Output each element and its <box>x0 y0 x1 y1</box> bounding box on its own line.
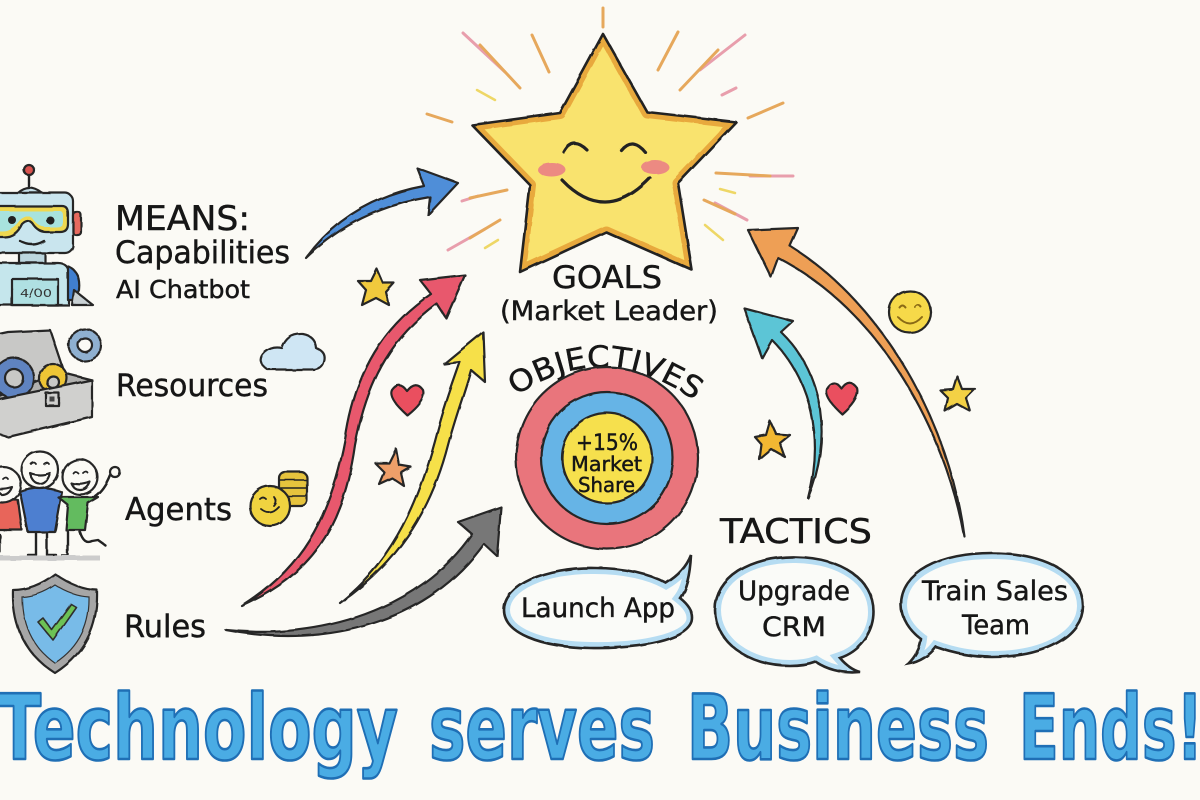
icon: agents group <box>0 452 120 558</box>
heading: goals <box>500 260 718 327</box>
icon: toolbox with gears <box>0 329 101 437</box>
text: market share objective: Market <box>571 452 642 476</box>
arrow: grey, rules to objectives <box>226 507 501 636</box>
title: technology serves business ends: Business <box>687 676 989 781</box>
icon: yellow star right <box>940 376 975 411</box>
text: resources: Resources <box>116 368 268 404</box>
icon: coins <box>250 472 307 526</box>
icon: sun rays <box>427 8 793 250</box>
text: market share objective: +15% <box>576 431 638 456</box>
icon: orange star <box>375 449 411 486</box>
icon: red heart <box>827 383 857 414</box>
text: agents: Agents <box>125 492 232 528</box>
arrow: red, resources to goals <box>242 275 465 606</box>
icon: smiley <box>889 291 931 333</box>
arrow: blue, means to goals <box>306 168 458 258</box>
text: market share objective <box>571 431 642 497</box>
callout: launch app <box>504 555 692 648</box>
title: technology serves business ends <box>0 676 1200 781</box>
icon: small star <box>358 269 394 305</box>
icon: cloud <box>261 334 325 370</box>
icon: robot <box>0 165 93 305</box>
callout: upgrade crm: CRM <box>762 612 826 643</box>
callout: train sales team <box>901 553 1083 664</box>
heading: objectives: OBJECTIVES <box>510 344 704 398</box>
arrow: teal, tactics to goals <box>744 308 822 498</box>
callout: upgrade crm <box>715 557 874 672</box>
icon: smiling star, goals <box>472 34 736 272</box>
text: means: Capabilities <box>115 235 290 271</box>
callout: train sales team: Team <box>961 610 1030 641</box>
heading: goals: GOALS <box>552 260 662 296</box>
callout: launch app: Launch App <box>521 593 675 624</box>
heading: goals: (Market Leader) <box>500 296 718 327</box>
text: rules: Rules <box>124 609 206 645</box>
icon: heart <box>391 385 423 415</box>
text: means: AI Chatbot <box>116 275 250 304</box>
callout: train sales team: Train Sales <box>921 576 1068 607</box>
text: means <box>115 199 290 304</box>
callout: upgrade crm: Upgrade <box>738 576 850 607</box>
title: technology serves business ends: serves <box>429 676 655 781</box>
text: means: MEANS: <box>115 199 250 239</box>
text: market share objective: Share <box>578 473 635 497</box>
arrow: orange, tactics to goals <box>748 228 964 536</box>
chart: objectives target <box>516 367 698 549</box>
heading: tactics: TACTICS <box>719 512 872 552</box>
title: technology serves business ends: Technology <box>0 676 398 781</box>
icon: robot: 4/00 <box>20 287 52 300</box>
icon: shield <box>13 574 97 673</box>
arrow: yellow, agents to objectives <box>340 332 485 603</box>
icon: gold star near teal arrow <box>755 421 790 459</box>
